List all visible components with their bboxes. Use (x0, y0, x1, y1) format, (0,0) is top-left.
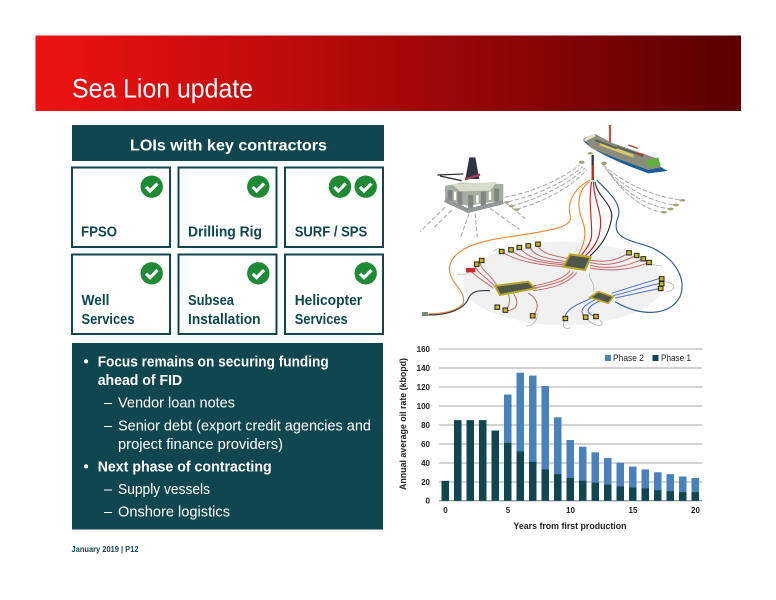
panel: next steps text: Onshore logistics (118, 505, 230, 521)
panel: next steps text: Focus remains on securing funding (98, 355, 329, 371)
panel: next steps text: Next phase of contracting (98, 460, 272, 476)
panel: next steps text (72, 343, 383, 530)
card: Drilling Rig: Drilling Rig (188, 225, 262, 241)
icon: drilling rig (437, 157, 503, 212)
x axis title: Years from first production (514, 521, 626, 531)
icon: FPSO vessel (583, 125, 668, 173)
y axis labels (417, 345, 431, 506)
panel: next steps text: Senior debt (export credit agencies and (118, 419, 371, 435)
card: Helicopter Services (285, 254, 383, 334)
panel: next steps text: project finance providers) (118, 437, 283, 453)
panel: next steps text: ahead of FID (98, 373, 182, 389)
seabed area (463, 242, 663, 325)
card: Well Services: Services (82, 312, 134, 328)
card: Subsea Installation: Installation (188, 312, 260, 328)
heading: LOIs with key contractors (72, 125, 384, 161)
panel: next steps text: – (104, 419, 113, 435)
shore connection (422, 312, 428, 316)
y axis title: Annual average oil rate (kbopd) (398, 358, 408, 490)
y axis labels: 120 (417, 383, 431, 392)
y axis labels: 160 (417, 345, 431, 354)
card: Drilling Rig (178, 168, 276, 247)
phase 1 bars (442, 420, 699, 501)
y axis labels: 140 (417, 364, 431, 373)
x axis labels: 15 (629, 506, 638, 515)
subsea field layout diagram (420, 125, 685, 329)
panel: next steps text: Vendor loan notes (118, 396, 235, 412)
title: Sea Lion update (72, 74, 253, 104)
card: Helicopter Services: Helicopter (295, 293, 363, 309)
legend: Phase 2 (613, 353, 644, 363)
footer: date and page number: January 2019 | P12 (72, 545, 139, 554)
card: Subsea Installation: Subsea (188, 293, 235, 309)
panel: next steps text: Supply vessels (118, 482, 210, 498)
y axis labels: 80 (421, 421, 431, 430)
title banner (36, 36, 741, 111)
card: SURF / SPS: SURF / SPS (295, 225, 367, 241)
card: FPSO: FPSO (81, 225, 117, 241)
y axis labels: 20 (421, 478, 431, 487)
panel: next steps text: – (104, 482, 113, 498)
card: Well Services: Well (82, 293, 110, 309)
card: Subsea Installation (178, 254, 276, 334)
panel: next steps text: – (104, 505, 113, 521)
y axis labels: 0 (426, 496, 431, 506)
panel: next steps text: • (84, 460, 89, 476)
y axis labels: 60 (421, 440, 431, 449)
panel: contractor status grid (72, 168, 383, 334)
flowlines to wells (470, 245, 648, 315)
heading: LOIs with key contractors: LOIs with key contractors (130, 138, 327, 154)
panel: next steps text: – (104, 396, 113, 412)
subsea manifolds (495, 254, 613, 303)
gridlines (439, 349, 702, 501)
x axis labels: 0 (443, 506, 448, 515)
x axis labels (443, 506, 700, 515)
card: SURF / SPS (285, 168, 383, 247)
umbilical loops (458, 249, 674, 329)
x axis labels: 20 (691, 506, 700, 515)
red wellhead (466, 268, 475, 272)
card: Helicopter Services: Services (295, 312, 348, 328)
card: FPSO (72, 168, 170, 247)
x axis labels: 5 (506, 506, 511, 515)
bar chart: annual average oil rate (398, 345, 702, 531)
y axis labels: 100 (417, 402, 431, 411)
legend (605, 353, 691, 363)
anchors (504, 152, 685, 214)
mooring lines (420, 165, 682, 237)
y axis labels: 40 (421, 459, 431, 468)
phase 2 bars (504, 373, 699, 501)
card: Well Services (72, 254, 170, 334)
wellheads (474, 242, 664, 321)
panel: next steps text: • (84, 355, 89, 371)
x axis labels: 10 (566, 506, 575, 515)
legend: Phase 1 (661, 353, 691, 363)
flexible risers (428, 155, 682, 315)
